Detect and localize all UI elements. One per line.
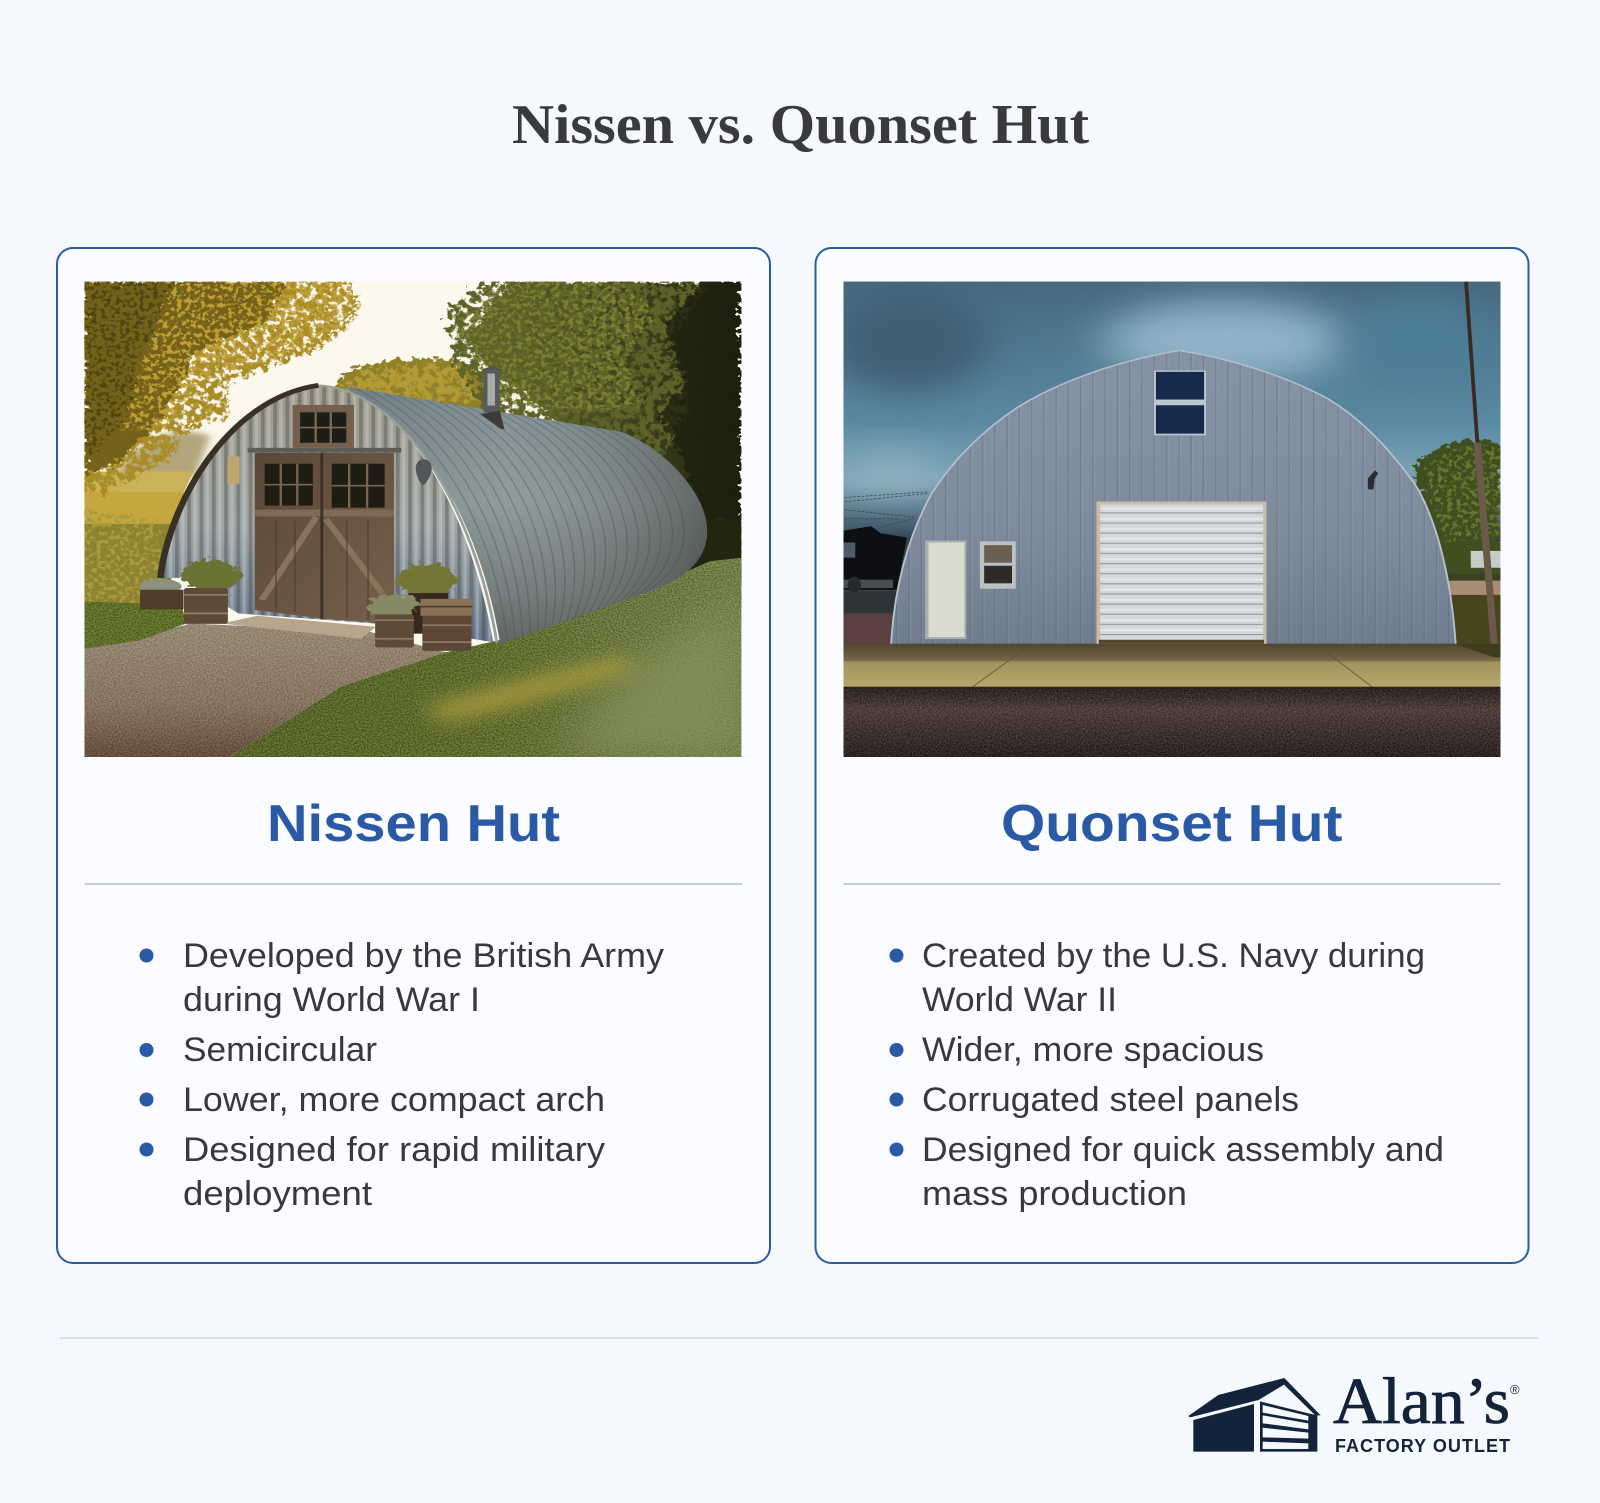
bullet list: Quonset Hut facts xyxy=(890,937,1444,1213)
stone step xyxy=(222,616,376,639)
bullet list: Nissen Hut facts: Designed for rapid military xyxy=(183,1131,605,1169)
tagline: FACTORY OUTLET xyxy=(1335,1436,1510,1456)
small window xyxy=(980,541,1016,589)
bullet list: Nissen Hut facts: Semicircular xyxy=(183,1031,377,1069)
bullet list: Nissen Hut facts: Lower, more compact arch xyxy=(183,1081,605,1119)
barn doors xyxy=(255,453,394,624)
truck xyxy=(844,526,907,593)
bullet list: Nissen Hut facts: deployment xyxy=(183,1175,373,1213)
roll-up garage door xyxy=(1096,502,1266,644)
title: Nissen vs. Quonset Hut xyxy=(512,94,1089,156)
heading: Quonset Hut: Quonset Hut xyxy=(1001,795,1342,853)
bullet list: Nissen Hut facts: during World War I xyxy=(183,981,480,1019)
bullet list: Quonset Hut facts: Designed for quick assembly and xyxy=(922,1131,1444,1169)
panel: Nissen Hut xyxy=(57,248,770,1263)
wall light xyxy=(1368,470,1378,489)
logo: Alan's Factory Outlet xyxy=(1188,1365,1520,1456)
bullet list: Nissen Hut facts xyxy=(140,937,664,1213)
background ground xyxy=(844,580,1500,659)
planters and barrels xyxy=(139,560,472,651)
wordmark: Alan’s xyxy=(1333,1365,1510,1438)
utility pole xyxy=(1466,282,1495,657)
card frame xyxy=(816,248,1528,1263)
gable window xyxy=(1154,370,1206,435)
bullet list: Quonset Hut facts: Corrugated steel panels xyxy=(922,1081,1299,1119)
bullet list: Quonset Hut facts: Wider, more spacious xyxy=(922,1031,1264,1069)
asphalt road xyxy=(844,689,1500,757)
registered mark: ® xyxy=(1510,1382,1520,1397)
bullet list: Nissen Hut facts: Developed by the British Army xyxy=(183,937,664,975)
upper window xyxy=(293,405,354,448)
panel: Quonset Hut xyxy=(816,248,1528,1263)
photo: Quonset hut on a street xyxy=(844,282,1500,757)
wall lamps xyxy=(227,456,432,485)
side door xyxy=(925,540,966,639)
photo: Nissen hut in a meadow xyxy=(84,282,742,757)
bullet list: Quonset Hut facts: World War II xyxy=(922,981,1117,1019)
heading: Nissen Hut: Nissen Hut xyxy=(267,795,560,853)
chimney xyxy=(480,366,504,429)
bullet list: Quonset Hut facts: mass production xyxy=(922,1175,1187,1213)
power lines xyxy=(844,492,928,527)
card frame xyxy=(57,248,770,1263)
bullet list: Quonset Hut facts: Created by the U.S. Navy during xyxy=(922,937,1425,975)
tree and house at right xyxy=(1414,439,1500,581)
concrete sidewalk xyxy=(844,644,1500,689)
icon: garage xyxy=(1188,1378,1321,1452)
quonset building xyxy=(891,351,1456,644)
